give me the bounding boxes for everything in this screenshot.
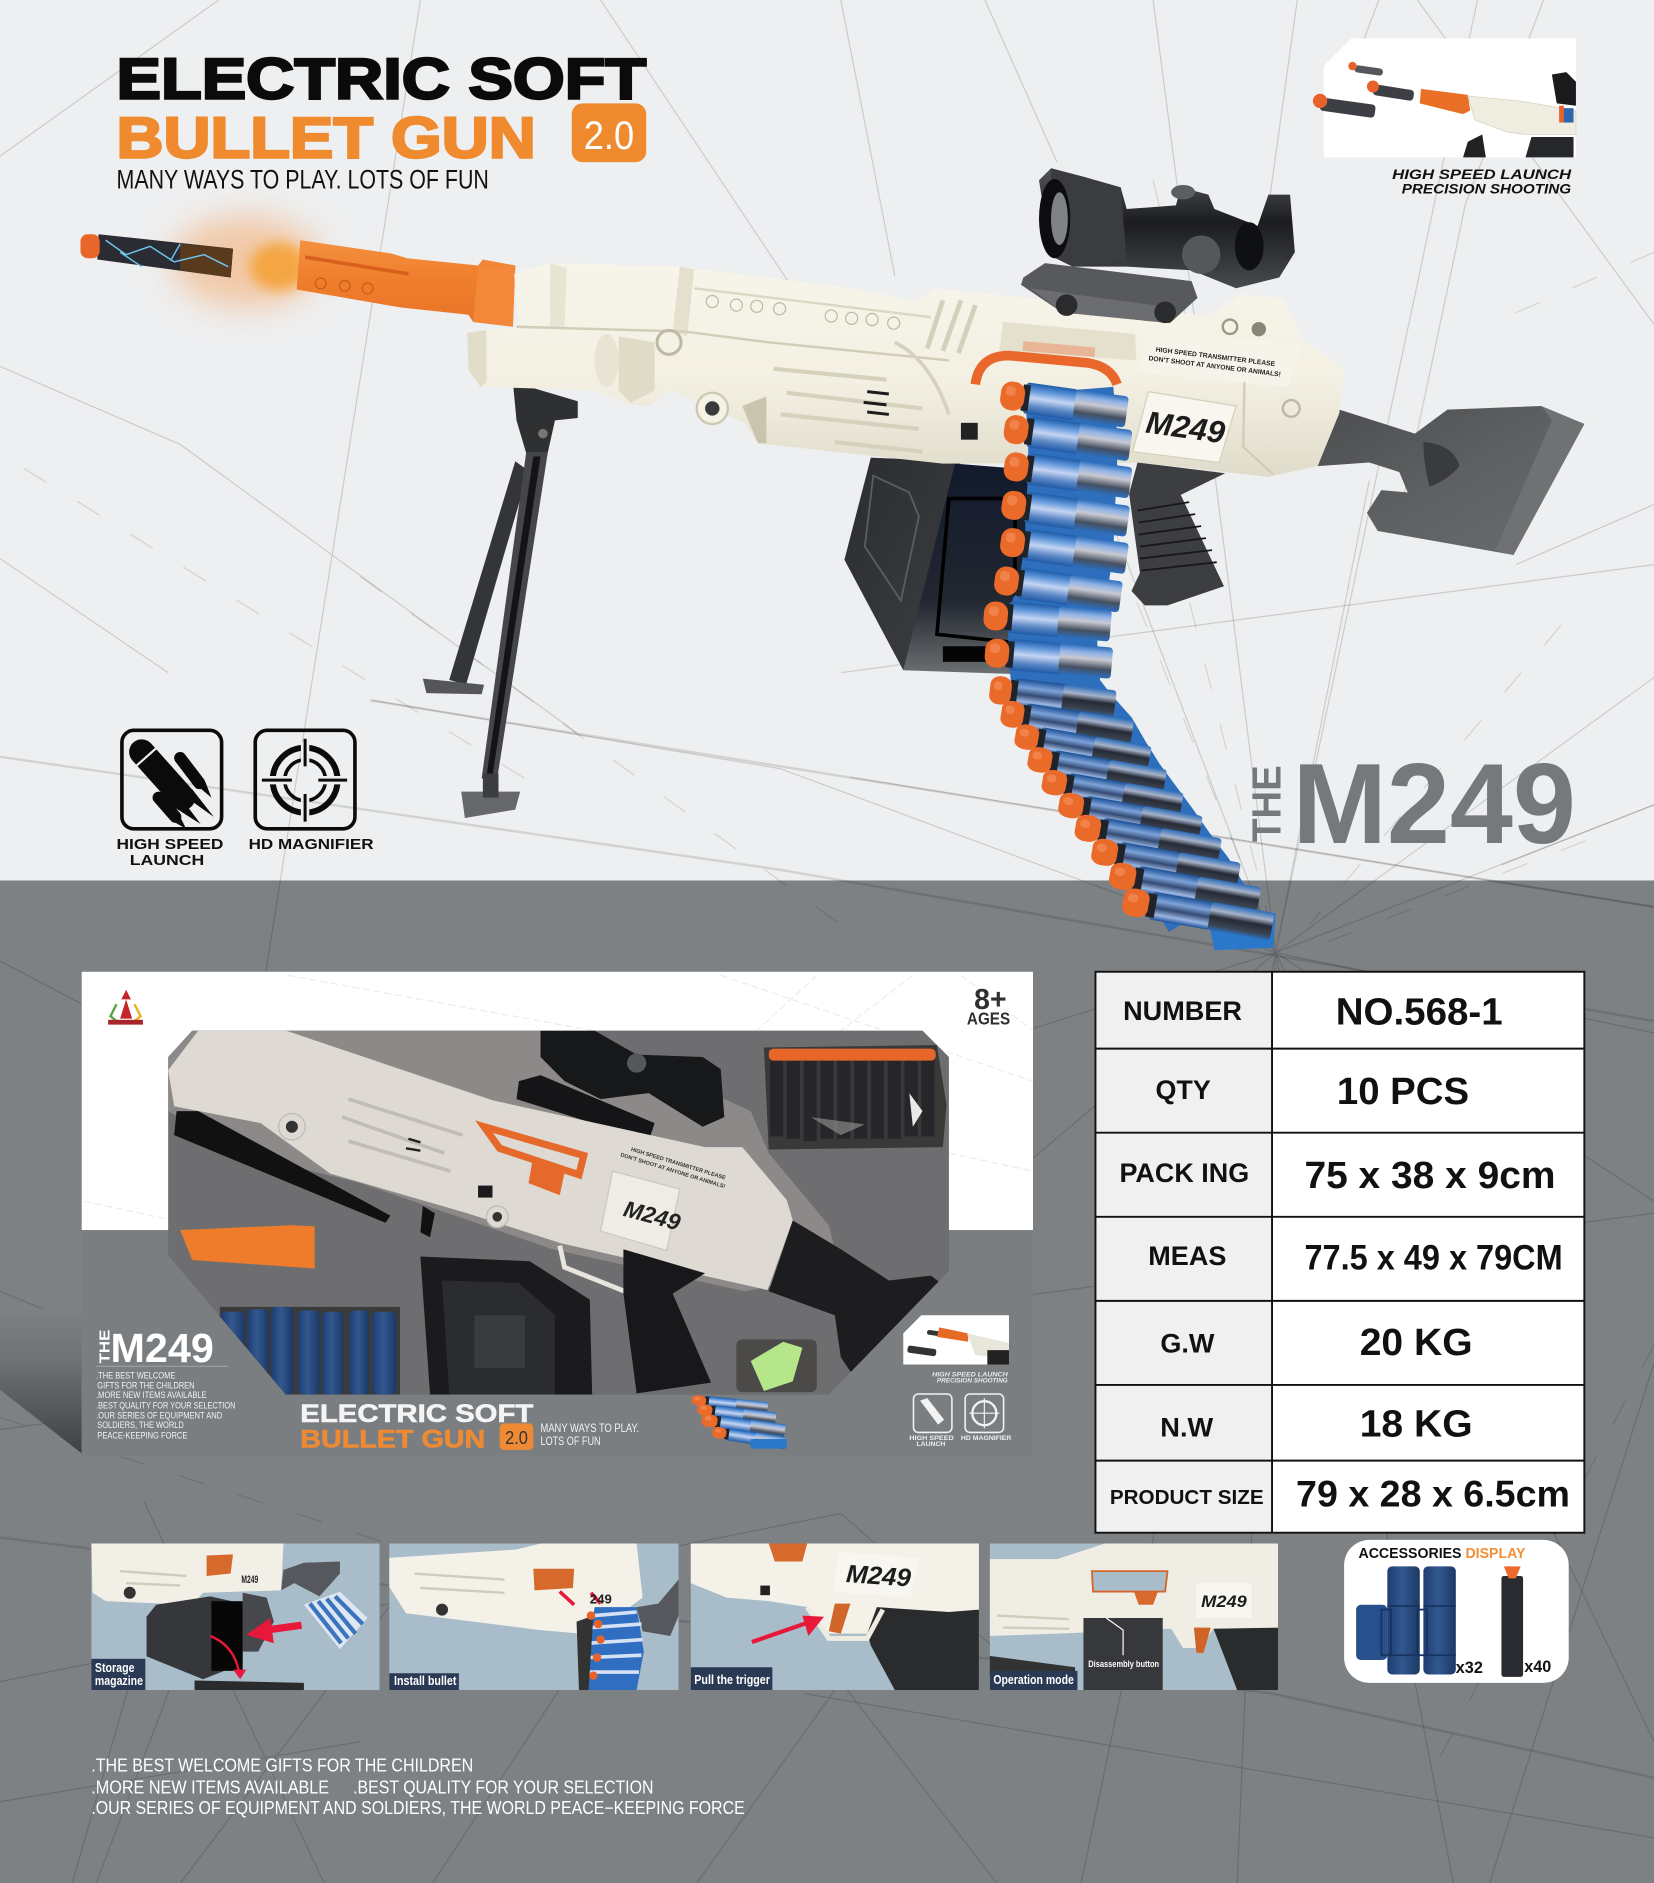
title: ELECTRIC SOFT: [117, 48, 646, 112]
table labels: G.W: [1160, 1329, 1215, 1359]
box description: .MORE NEW ITEMS AVAILABLE: [96, 1390, 207, 1400]
box shadow wedge: [0, 1309, 82, 1453]
step 3: pull the trigger: M249: [845, 1560, 912, 1592]
tray contents: DON'T SHOOT AT ANYONE OR ANIMALS!: [620, 1152, 726, 1190]
boxed gun scope: [541, 1031, 724, 1127]
box model name: THE: [96, 1330, 113, 1363]
model name: THE M249: THE: [1243, 765, 1289, 842]
box title: [300, 1400, 534, 1453]
window: [168, 1031, 949, 1395]
gun warning text: HIGH SPEED TRANSMITTER PLEASE: [1155, 347, 1276, 368]
tray contents: [168, 1031, 951, 1395]
model name: THE M249: M249: [1292, 741, 1576, 868]
box tagline: MANY WAYS TO PLAY.: [541, 1421, 639, 1435]
box tagline: [541, 1421, 639, 1448]
box description: .OUR SERIES OF EQUIPMENT AND: [96, 1411, 222, 1421]
feature labels: LAUNCH: [130, 853, 204, 869]
table labels: N.W: [1160, 1413, 1214, 1443]
boxed trigger guard: [560, 1246, 625, 1291]
box small inset picture: [903, 1315, 1009, 1365]
table labels: NUMBER: [1123, 996, 1242, 1026]
step 2: install bullet: [389, 1544, 679, 1690]
footer text: .BEST QUALITY FOR YOUR SELECTION: [353, 1777, 653, 1797]
scope: [1021, 168, 1295, 323]
table labels: MEAS: [1148, 1241, 1226, 1271]
step 4 captions: Operation mode: [993, 1672, 1074, 1687]
boxed muzzle cap: [180, 1225, 315, 1268]
boxed gun body: [168, 1031, 793, 1290]
step 4: operation mode: [985, 1544, 1278, 1690]
boxed pistol grip: [623, 1249, 711, 1393]
box white top: [82, 972, 1033, 1230]
table values: NO.568-1: [1336, 991, 1503, 1034]
title: BULLET GUN: [117, 106, 536, 170]
boxed magazine: [420, 1256, 592, 1395]
feature icon: HD magnifier: [255, 730, 355, 829]
gun body: [467, 263, 1344, 477]
table labels: PACK ING: [1119, 1158, 1249, 1188]
step 2 caption: Install bullet: [394, 1673, 457, 1688]
accessory: blue shell: [1356, 1566, 1456, 1674]
boxed gun stock: [768, 1220, 938, 1372]
boxed gun logo: M249: [621, 1195, 684, 1235]
ammo belt: [975, 356, 1276, 950]
box description: SOLDIERS, THE WORLD: [97, 1420, 184, 1430]
box tagline: LOTS OF FUN: [541, 1434, 601, 1448]
boxed blue shells: [220, 1307, 400, 1395]
background: light upper area: [0, 0, 1654, 882]
inset caption: HIGH SPEED LAUNCH: [1392, 166, 1572, 182]
box icon labels: [909, 1435, 1012, 1448]
box description: .THE BEST WELCOME: [96, 1370, 175, 1380]
brand logo: [108, 990, 143, 1025]
box small inset caption: PRECISION SHOOTING: [937, 1378, 1008, 1385]
product box photo: [82, 972, 1033, 1456]
accessory quantities: x40: [1524, 1658, 1551, 1676]
box small inset caption: HIGH SPEED LAUNCH: [932, 1372, 1008, 1379]
table values: [1296, 991, 1570, 1514]
boxed gun rail: [174, 1111, 390, 1223]
box title: BULLET GUN: [300, 1425, 485, 1453]
table labels: QTY: [1156, 1075, 1211, 1105]
box icons: [913, 1394, 1004, 1432]
accessories panel: [1344, 1540, 1569, 1683]
fired dart with lightning: [80, 216, 321, 308]
spec table: [1095, 972, 1584, 1533]
feature labels: [117, 837, 374, 869]
box description: GIFTS FOR THE CHILDREN: [97, 1381, 195, 1391]
accessory quantities: x32: [1456, 1659, 1483, 1677]
step 3 caption: Pull the trigger: [694, 1672, 770, 1687]
gun warning text: DON'T SHOOT AT ANYONE OR ANIMALS!: [1148, 355, 1281, 379]
stock: [1318, 406, 1584, 555]
table values: 18 KG: [1360, 1403, 1473, 1446]
step 4: operation mode: M249: [1201, 1592, 1248, 1611]
step 1: storage magazine: [91, 1544, 380, 1690]
bipod: [423, 382, 578, 818]
background: grey lower area: [0, 880, 1654, 1883]
tray contents: HIGH SPEED TRANSMITTER PLEASE: [630, 1147, 726, 1182]
step 1 caption: Storage: [95, 1660, 135, 1675]
footer text: .OUR SERIES OF EQUIPMENT AND SOLDIERS, THE WORLD PEACE−KEEPING FORCE: [91, 1798, 745, 1818]
magazine: [844, 458, 1047, 675]
accessory: foam dart: [1501, 1566, 1523, 1677]
version badge 2.0: 2.0: [584, 114, 634, 158]
box icon labels: HIGH SPEED: [909, 1435, 954, 1442]
box ammo belt graphic: [691, 1394, 787, 1449]
table values: 79 x 28 x 6.5cm: [1296, 1472, 1570, 1514]
feature labels: HD MAGNIFIER: [249, 837, 374, 853]
muzzle cap: [297, 240, 515, 327]
box icon labels: HD MAGNIFIER: [961, 1435, 1012, 1442]
box title: ELECTRIC SOFT: [300, 1400, 534, 1428]
table labels: [1110, 996, 1264, 1509]
age mark 8+: AGES: [967, 1009, 1010, 1029]
footer text: [91, 1756, 745, 1818]
pistol grip: [1129, 462, 1225, 605]
tagline: MANY WAYS TO PLAY. LOTS OF FUN: [117, 165, 489, 195]
accessory quantities: [1456, 1658, 1551, 1677]
boxed gun orange carrier: [484, 1127, 584, 1175]
step 1 caption: [95, 1663, 143, 1688]
gun logo M249: M249: [1144, 405, 1228, 451]
box model name: M249: [111, 1325, 214, 1371]
footer text: .MORE NEW ITEMS AVAILABLE: [91, 1777, 329, 1797]
title: [117, 48, 646, 170]
table values: 10 PCS: [1337, 1070, 1469, 1113]
hero gun: [80, 168, 1584, 950]
table values: 75 x 38 x 9cm: [1304, 1154, 1556, 1197]
box description: PEACE-KEEPING FORCE: [97, 1430, 187, 1440]
box badge: 2.0: [505, 1428, 528, 1448]
inset caption: [1392, 166, 1572, 196]
box base: [82, 972, 1033, 1456]
inset caption: PRECISION SHOOTING: [1402, 180, 1571, 196]
table values: 20 KG: [1360, 1321, 1473, 1364]
box small inset caption: [932, 1372, 1008, 1385]
version badge 2.0: [572, 103, 646, 162]
step 4 captions: [993, 1659, 1159, 1687]
feature labels: HIGH SPEED: [117, 837, 223, 853]
boxed battery: [736, 1339, 817, 1392]
box icon labels: LAUNCH: [916, 1441, 946, 1448]
age mark 8+: 8+: [974, 984, 1007, 1016]
step 3: pull the trigger: [691, 1544, 979, 1690]
inset: high speed launch picture: [1313, 38, 1576, 157]
step 1: storage magazine: M249: [241, 1574, 258, 1586]
box description: .BEST QUALITY FOR YOUR SELECTION: [96, 1400, 235, 1410]
table values: 77.5 x 49 x 79CM: [1304, 1239, 1563, 1278]
step 2: install bullet: 249: [590, 1592, 612, 1607]
table labels: PRODUCT SIZE: [1110, 1486, 1264, 1509]
footer text: .THE BEST WELCOME GIFTS FOR THE CHILDREN: [91, 1756, 473, 1776]
accessories heading: ACCESSORIES DISPLAY: [1359, 1545, 1525, 1562]
age mark 8+: [967, 984, 1010, 1029]
step 4 captions: Disassembly button: [1088, 1659, 1159, 1670]
boxed dart pack: [764, 1045, 947, 1150]
box description: [96, 1370, 235, 1440]
feature icon: high speed launch: [122, 730, 222, 829]
box badge: [500, 1423, 533, 1450]
step 1 caption: magazine: [95, 1673, 143, 1688]
